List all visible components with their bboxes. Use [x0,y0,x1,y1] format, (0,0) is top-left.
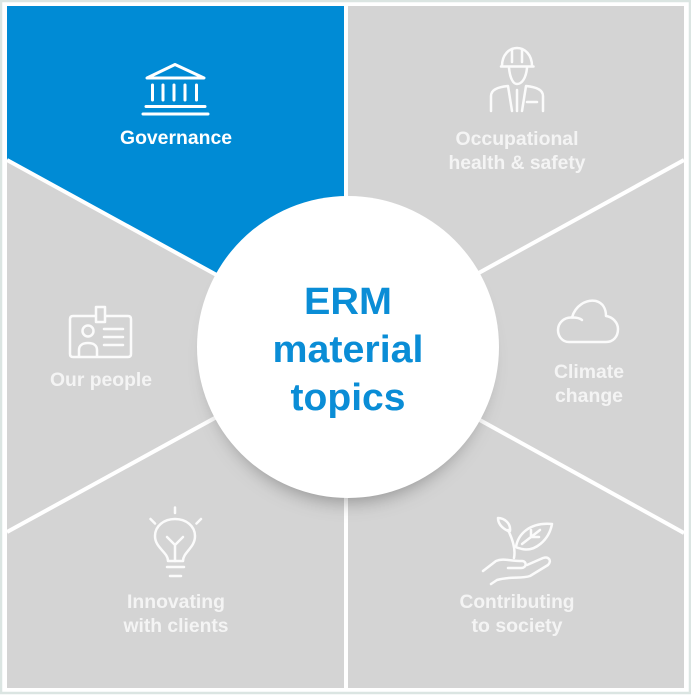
label: Governance: Governance [120,128,232,149]
heading: ERM material topics: material [272,329,424,371]
icon: light bulb [150,508,201,576]
label: Contributing to society [460,592,574,637]
panel: Occupational health & safety [448,48,586,174]
label: Climate change [554,362,624,407]
icon: ID badge [70,307,131,357]
panel: Innovating with clients [122,508,228,637]
heading: ERM material topics [272,281,424,419]
label: Occupational health & safety [448,129,586,174]
heading: ERM material topics: ERM [304,281,392,323]
label: Climate change: change [555,386,623,407]
label: Occupational health & safety: health & safety [448,153,586,174]
central circle [197,196,499,500]
icon: hand holding plant [483,518,552,584]
icon: worker with hard hat [491,48,543,111]
label: Contributing to society: Contributing [460,592,574,613]
panel: governance segment [7,6,344,346]
panel: Our people [50,307,152,391]
label: Innovating with clients: Innovating [127,592,225,613]
icon: cloud [558,301,618,342]
icon: classical building [143,64,208,114]
label: Occupational health & safety: Occupational [456,129,578,150]
heading: ERM material topics: topics [290,377,406,419]
panel: Contributing to society [460,518,574,637]
panel: Climate change [554,301,624,407]
label: Innovating with clients: with clients [122,616,228,637]
label: Climate change: Climate [554,362,624,383]
panel: Governance [120,64,232,149]
label: Our people: Our people [50,370,152,391]
label: Contributing to society: to society [472,616,563,637]
label: Innovating with clients [122,592,228,637]
